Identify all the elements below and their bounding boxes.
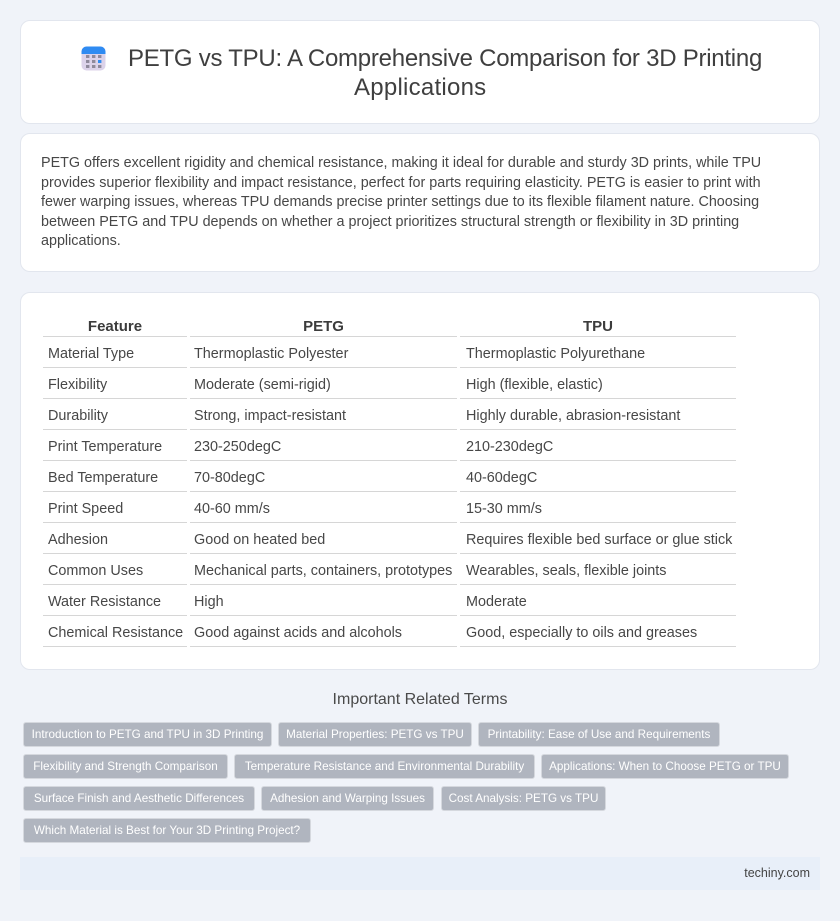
panel: intro text card xyxy=(20,133,820,272)
comparison table: Bed Temperature xyxy=(48,470,158,486)
panel: title card xyxy=(20,20,820,124)
footer site name: techiny.com xyxy=(744,866,810,880)
comparison table: Thermoplastic Polyurethane xyxy=(466,346,645,362)
comparison table: Print Speed xyxy=(48,501,123,517)
footer xyxy=(20,857,820,890)
intro paragraph: fewer warping issues, whereas TPU demands precise printer settings due to its flexible filament nature. Choosing xyxy=(41,194,759,210)
comparison table: Water Resistance xyxy=(48,594,161,610)
comparison table: 210-230degC xyxy=(466,439,553,455)
chips: related terms: Material Properties: PETG vs TPU xyxy=(286,728,464,741)
chips: related terms: Surface Finish and Aesthetic Differences xyxy=(34,792,244,805)
intro paragraph xyxy=(41,155,761,249)
comparison table: Flexibility xyxy=(48,377,107,393)
comparison table: Wearables, seals, flexible joints xyxy=(466,563,666,579)
chips: related terms: Cost Analysis: PETG vs TPU xyxy=(449,792,598,805)
comparison table: Strong, impact-resistant xyxy=(194,408,346,424)
comparison table: 70-80degC xyxy=(194,470,265,486)
panel: comparison table card xyxy=(20,292,820,670)
comparison table: High (flexible, elastic) xyxy=(466,377,603,393)
comparison table: Feature xyxy=(88,318,142,335)
comparison table: Mechanical parts, containers, prototypes xyxy=(194,563,452,579)
intro paragraph: between PETG and TPU depends on whether a project prioritizes structural strength or flexibility in 3D printing xyxy=(41,214,739,230)
chips: related terms: Which Material is Best for Your 3D Printing Project? xyxy=(34,824,300,837)
chips: related terms: Adhesion and Warping Issues xyxy=(270,792,425,805)
comparison table: 40-60degC xyxy=(466,470,537,486)
intro paragraph: PETG offers excellent rigidity and chemical resistance, making it ideal for durable and sturdy 3D prints, while TPU xyxy=(41,155,761,171)
intro paragraph: provides superior flexibility and impact resistance, perfect for parts requiring elasticity. PETG is easier to print with xyxy=(41,174,761,190)
heading: related terms: Important Related Terms xyxy=(333,691,507,708)
comparison table: Adhesion xyxy=(48,532,108,548)
chips: related terms xyxy=(23,722,789,843)
comparison table: Requires flexible bed surface or glue stick xyxy=(466,532,732,548)
title: PETG vs TPU: A Comprehensive Comparison for 3D Printing xyxy=(128,45,762,72)
chips: related terms: Printability: Ease of Use and Requirements xyxy=(488,728,710,741)
comparison table: Good, especially to oils and greases xyxy=(466,625,697,641)
comparison table: Good on heated bed xyxy=(194,532,325,548)
comparison table: 230-250degC xyxy=(194,439,281,455)
chips: related terms: Introduction to PETG and TPU in 3D Printing xyxy=(32,728,263,741)
comparison table: Chemical Resistance xyxy=(48,625,183,641)
chips: related terms: Applications: When to Choose PETG or TPU xyxy=(549,760,781,773)
title xyxy=(128,45,762,101)
comparison table: PETG xyxy=(303,318,344,335)
chips: related terms: Temperature Resistance and Environmental Durability xyxy=(245,760,524,773)
comparison table: High xyxy=(194,594,224,610)
comparison table: Moderate xyxy=(466,594,527,610)
comparison table: Highly durable, abrasion-resistant xyxy=(466,408,680,424)
title: Applications xyxy=(354,74,486,101)
comparison table: Durability xyxy=(48,408,108,424)
comparison table: Print Temperature xyxy=(48,439,162,455)
chips: related terms: Flexibility and Strength Comparison xyxy=(33,760,218,773)
comparison table: Good against acids and alcohols xyxy=(194,625,402,641)
comparison table: TPU xyxy=(583,318,613,335)
comparison table: Moderate (semi-rigid) xyxy=(194,377,331,393)
icon: calendar xyxy=(82,46,106,70)
comparison table: 40-60 mm/s xyxy=(194,501,270,517)
comparison table xyxy=(43,318,736,647)
comparison table: Thermoplastic Polyester xyxy=(194,346,348,362)
comparison table: Material Type xyxy=(48,346,134,362)
intro paragraph: applications. xyxy=(41,233,121,249)
comparison table: Common Uses xyxy=(48,563,143,579)
comparison table: 15-30 mm/s xyxy=(466,501,542,517)
